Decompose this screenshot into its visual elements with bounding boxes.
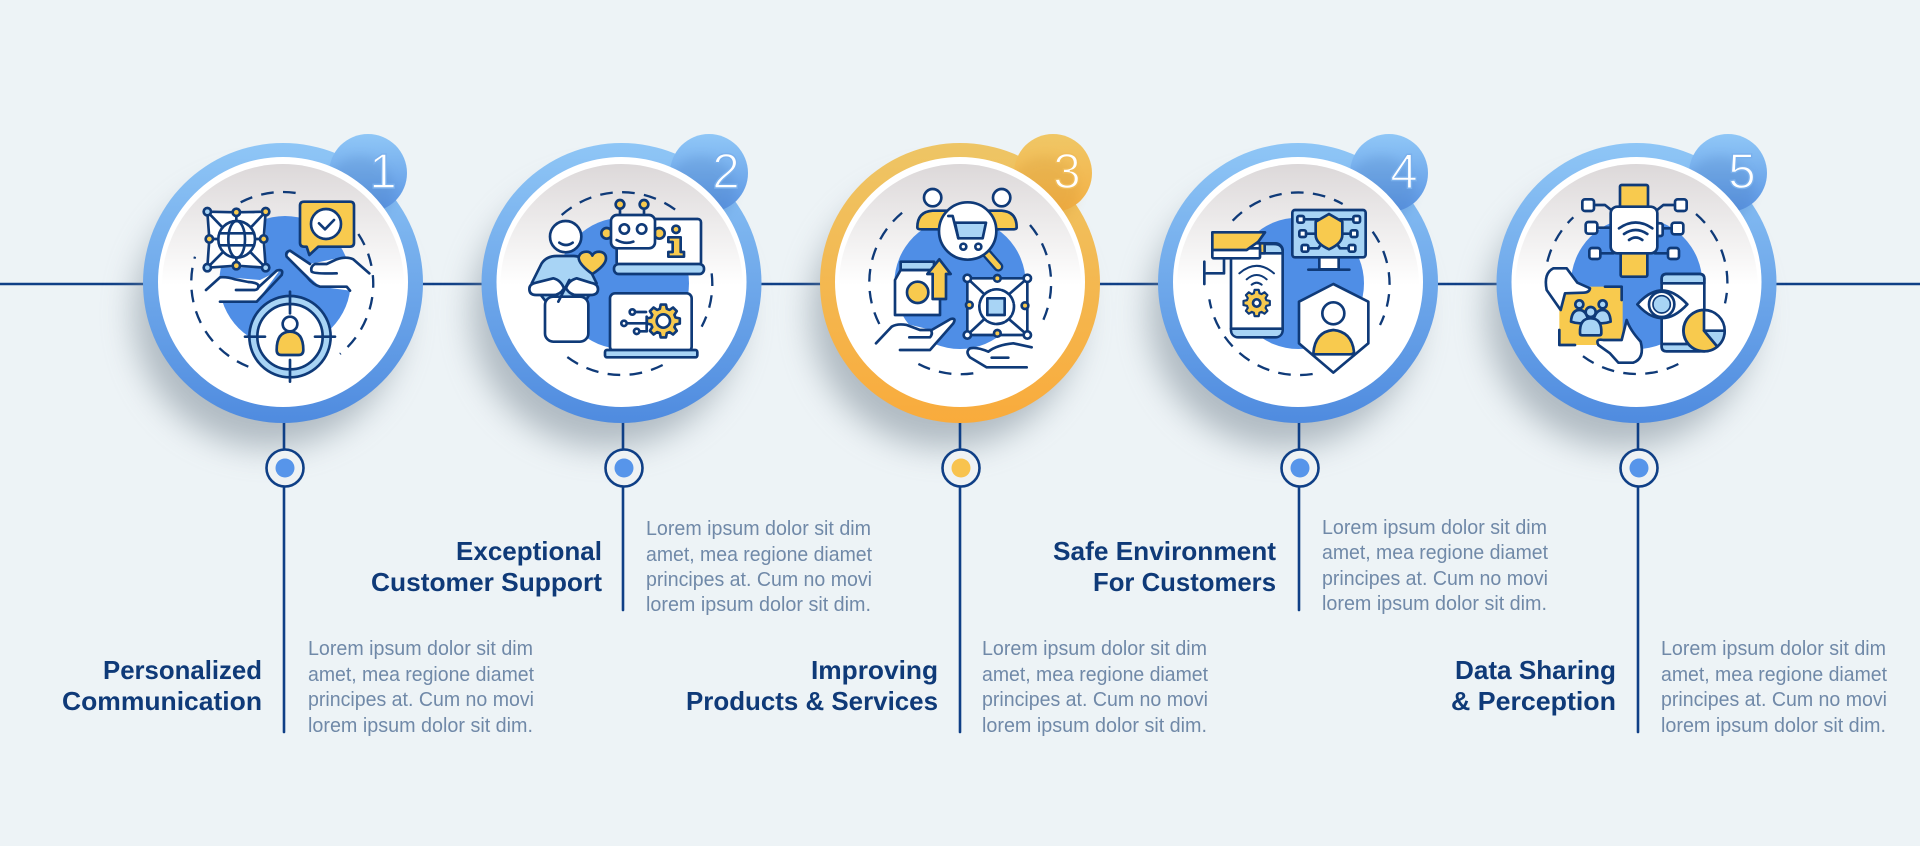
drop shadow 2 [472,180,740,448]
connector 4 [1282,420,1318,610]
text block 5: lorem ipsum dolor sit dim. [1661,715,1886,737]
text block 4: lorem ipsum dolor sit dim. [1322,593,1547,615]
heading 4: For Customers [1093,567,1276,597]
dish 2 [496,157,746,407]
icon: safe environment [1204,192,1390,375]
number 1: 1 [369,145,397,199]
icon part: security camera [1204,232,1283,284]
text block 5 [1661,638,1887,737]
text block 3: amet, mea regione diamet [982,664,1208,686]
icon part: eye [1637,290,1687,318]
text block 4: Lorem ipsum dolor sit dim [1322,517,1547,539]
dish 5 [1512,157,1762,407]
heading 2: Customer Support [371,567,602,597]
node dot 4 [1290,458,1310,478]
icon: personalized communication [191,192,373,382]
icon part: customer with bag and heart [529,221,606,342]
text block 1: Lorem ipsum dolor sit dim [308,638,533,660]
node dot 2 [614,458,634,478]
icon part: folder with team [1559,287,1623,345]
badge 3 [1011,134,1092,224]
drop shadow 3 [811,180,1079,448]
panel: step 5 [1451,134,1887,737]
badge 5 [1686,134,1767,224]
panel: step 3 [686,134,1208,737]
heading 1 [62,655,262,716]
text block 2 [646,518,872,616]
heading 3: Improving [811,655,938,685]
text block 5: Lorem ipsum dolor sit dim [1661,638,1886,660]
text block 2: lorem ipsum dolor sit dim. [646,594,871,616]
panel: step 4 [1053,134,1548,615]
icon part: smartwatch network [1582,185,1687,277]
text block 3: lorem ipsum dolor sit dim. [982,715,1207,737]
heading 3 [686,655,938,716]
heading 4: Safe Environment [1053,536,1276,566]
node dot 5 [1630,458,1648,478]
icon: data sharing [1546,185,1727,374]
drop shadow 1 [134,180,402,448]
ring 4 [1158,143,1438,423]
icon part: left hand [876,318,955,351]
connector 3 [942,420,980,732]
number 4: 4 [1390,145,1418,199]
heading 5: Data Sharing [1455,655,1616,685]
icon: customer support [529,192,712,375]
icon part: globe network [204,208,269,271]
icon part: product box and arrow [895,259,951,315]
drop shadow 4 [1149,180,1417,448]
text block 4 [1322,517,1548,615]
ring 2 [482,143,762,423]
icon part: check speech bubble [300,202,354,255]
number 2: 2 [712,145,740,199]
icon part: right hand [967,343,1032,367]
horizontal timeline [0,283,1920,285]
badge 2 [667,134,748,224]
icon part: laptop with info [614,219,704,274]
heading 1: Personalized [103,655,262,685]
heading 5: & Perception [1451,686,1616,716]
badge 4 [1347,134,1428,224]
ring 1 [143,143,423,423]
badge 1 [326,134,407,224]
text block 4: principes at. Cum no movi [1322,568,1548,590]
text block 5: principes at. Cum no movi [1661,689,1887,711]
panel: step 2 [371,134,872,616]
icon: improving products [869,189,1051,374]
connector 1 [266,420,304,732]
dish 1 [158,157,408,407]
ring 5 [1496,143,1776,423]
icon part: target with person [245,292,335,382]
text block 5: amet, mea regione diamet [1661,664,1887,686]
icon part: magnifier with cart [939,202,998,267]
connector 2 [606,420,642,610]
text block 1: lorem ipsum dolor sit dim. [308,715,533,737]
text block 2: principes at. Cum no movi [646,569,872,591]
icon part: smartphone [1231,243,1283,337]
text block 2: Lorem ipsum dolor sit dim [646,518,871,540]
icon part: shoppers [917,189,1017,229]
connector 5 [1620,420,1658,732]
heading 3: Products & Services [686,686,938,716]
icon part: phone [1662,274,1704,351]
number 5: 5 [1728,145,1756,199]
text block 3: principes at. Cum no movi [982,689,1208,711]
icon part: framing hands [1546,268,1642,363]
heading 4 [1053,536,1276,597]
drop shadow 5 [1487,180,1755,448]
heading 2: Exceptional [456,536,602,566]
dish 4 [1173,157,1423,407]
icon part: chip network [964,275,1031,339]
icon part: robot [601,200,665,248]
heading 1: Communication [62,686,262,716]
text block 1: amet, mea regione diamet [308,664,534,686]
text block 1: principes at. Cum no movi [308,689,534,711]
dish 3 [835,157,1085,407]
node dot 1 [276,458,294,478]
icon part: laptop with gear [605,293,697,357]
text block 3 [982,638,1208,737]
icon part: pie chart [1683,310,1725,351]
ring 3 [820,143,1100,423]
heading 2 [371,536,602,597]
text block 4: amet, mea regione diamet [1322,542,1548,564]
text block 2: amet, mea regione diamet [646,544,872,566]
text block 1 [308,638,534,737]
node dot 3 [952,458,970,478]
text block 3: Lorem ipsum dolor sit dim [982,638,1207,660]
heading 5 [1451,655,1616,716]
icon part: hands [206,251,373,307]
icon part: shield with user [1299,284,1368,373]
icon part: monitor with shield [1292,210,1366,270]
panel: step 1 [62,134,534,737]
number 3: 3 [1053,145,1081,199]
